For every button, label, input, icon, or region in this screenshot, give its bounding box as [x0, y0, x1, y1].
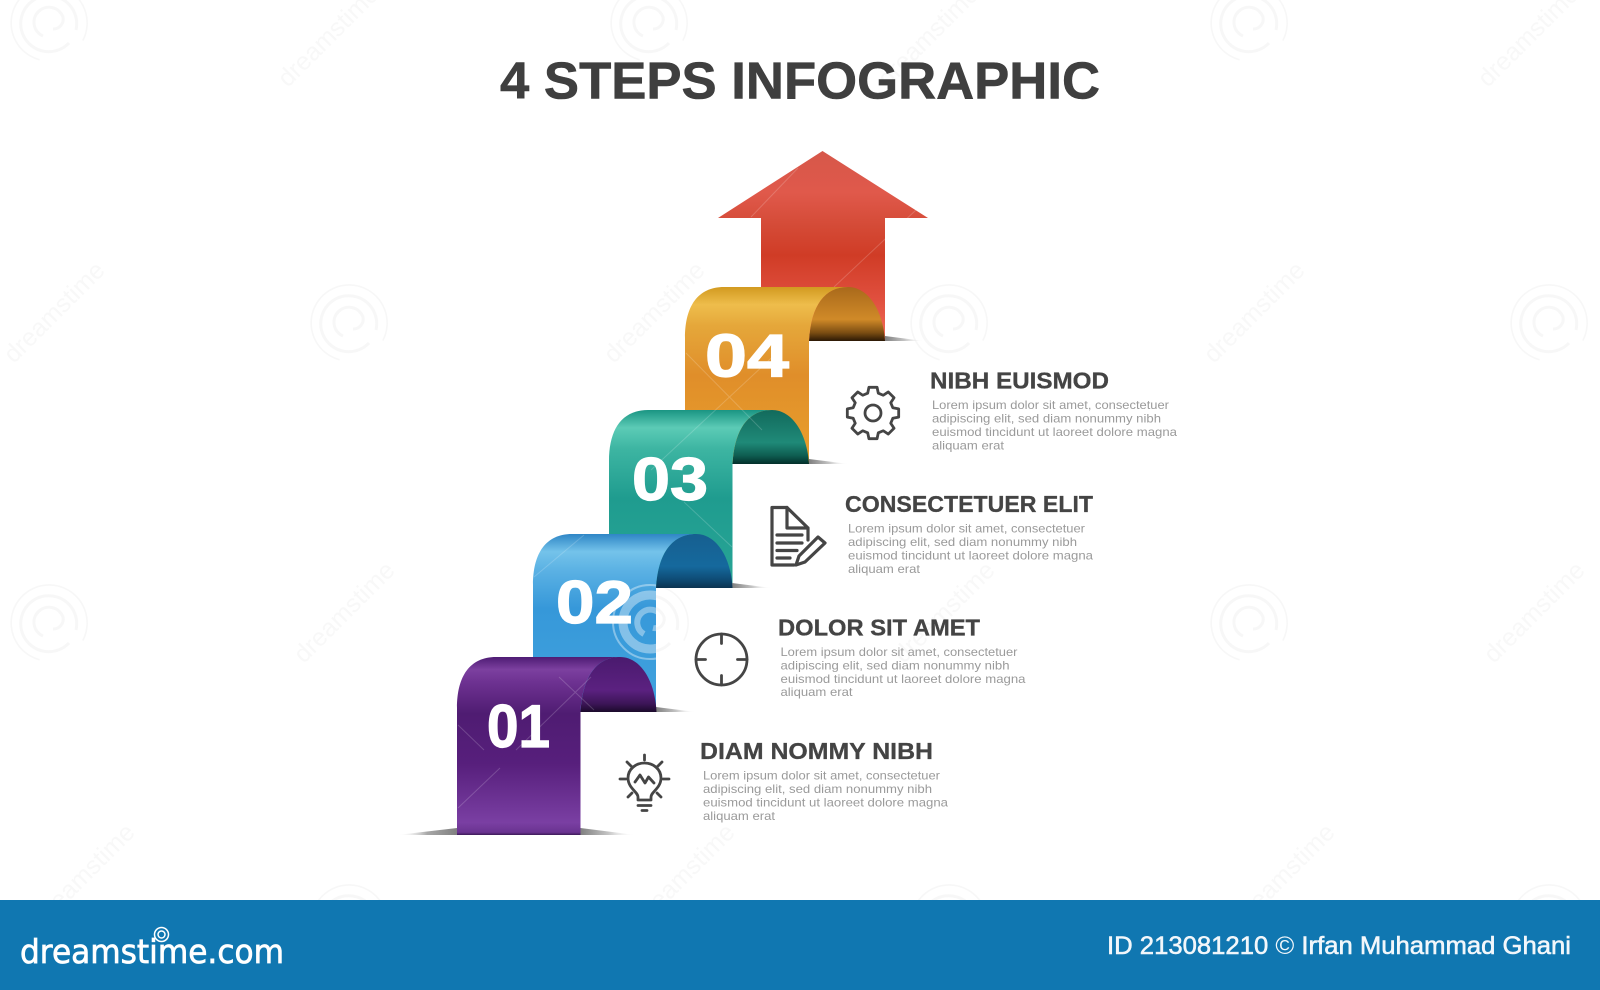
- back arch 03: [732, 410, 809, 464]
- body copy: aliquam erat: [848, 562, 921, 576]
- body copy: euismod tincidunt ut laoreet dolore magna: [932, 425, 1177, 439]
- step 01 ribbon: [397, 657, 696, 835]
- body copy: adipiscing elit, sed diam nonummy nibh: [703, 782, 932, 796]
- shadow 03: [809, 459, 849, 464]
- front face 03: [609, 410, 772, 587]
- front face 02: [533, 534, 696, 711]
- background watermark pattern: dreamstime: [1478, 556, 1590, 668]
- icon: target crosshair: [696, 634, 747, 685]
- text block: step 02: [778, 614, 1026, 699]
- background watermark pattern: dreamstime: [1228, 818, 1340, 930]
- shadow 01 right of arch: [656, 707, 696, 712]
- background watermark pattern: dreamstime: [598, 256, 710, 368]
- shadow 04: [885, 336, 924, 341]
- logo wordmark: dreamstime.com: [20, 932, 284, 971]
- icon: gear: [847, 387, 899, 439]
- title: 4 STEPS INFOGRAPHIC: [500, 52, 1100, 110]
- text block: step 04: [930, 368, 1177, 452]
- heading: DIAM NOMMY NIBH: [700, 738, 933, 764]
- body copy: aliquam erat: [780, 685, 853, 699]
- background watermark pattern: dreamstime: [628, 818, 740, 930]
- footer credit: ID 213081210 © Irfan Muhammad Ghani: [1107, 932, 1571, 960]
- body copy: adipiscing elit, sed diam nonummy nibh: [932, 412, 1161, 426]
- watermark lines across ribbons: [458, 168, 916, 808]
- number 02: 02: [556, 569, 633, 636]
- body copy: euismod tincidunt ut laoreet dolore magna: [703, 795, 948, 809]
- front face 01: [457, 657, 620, 835]
- icon: document with pencil: [772, 508, 825, 565]
- arrow: red upward arrow: [718, 151, 928, 341]
- text block: step 03: [845, 491, 1093, 576]
- back arch 02: [656, 534, 732, 588]
- heading: DOLOR SIT AMET: [778, 614, 980, 640]
- body copy: Lorem ipsum dolor sit amet, consectetuer: [780, 645, 1018, 659]
- back arch 01: [580, 657, 656, 712]
- ground shadow left: [397, 828, 457, 835]
- icon: light bulb: [620, 755, 669, 810]
- number 01: 01: [487, 693, 550, 760]
- background watermark pattern: dreamstime: [28, 818, 140, 930]
- step 02 ribbon: [533, 534, 772, 711]
- heading: NIBH EUISMOD: [930, 368, 1109, 394]
- body copy: Lorem ipsum dolor sit amet, consectetuer: [932, 398, 1169, 412]
- body copy: adipiscing elit, sed diam nonummy nibh: [780, 658, 1010, 672]
- number 04: 04: [705, 322, 790, 390]
- body copy: euismod tincidunt ut laoreet dolore magna: [848, 548, 1093, 562]
- step 03 ribbon: [609, 410, 849, 587]
- ground shadow right: [580, 828, 636, 835]
- background watermark pattern: dreamstime: [288, 556, 400, 668]
- footer logo: dreamstime.com: [20, 928, 284, 971]
- step 04 ribbon: [685, 287, 924, 464]
- number 03: 03: [632, 446, 708, 513]
- front face 04: [685, 287, 848, 464]
- body copy: aliquam erat: [703, 809, 776, 823]
- body copy: aliquam erat: [932, 438, 1005, 452]
- text block: step 01: [700, 738, 948, 823]
- back arch 04: [809, 287, 885, 341]
- heading: CONSECTETUER ELIT: [845, 491, 1093, 517]
- spiral watermark on ribbon 02: [613, 585, 687, 659]
- body copy: euismod tincidunt ut laoreet dolore magna: [780, 672, 1026, 686]
- background watermark pattern: dreamstime: [1198, 256, 1310, 368]
- shadow 02: [732, 583, 772, 588]
- body copy: Lorem ipsum dolor sit amet, consectetuer: [703, 768, 940, 782]
- background watermark pattern: dreamstime: [0, 256, 110, 368]
- body copy: Lorem ipsum dolor sit amet, consectetuer: [848, 522, 1085, 536]
- background watermark pattern: dreamstime: [888, 556, 1000, 668]
- logo spiral: [154, 928, 168, 942]
- body copy: adipiscing elit, sed diam nonummy nibh: [848, 535, 1077, 549]
- footer bar: [0, 900, 1600, 990]
